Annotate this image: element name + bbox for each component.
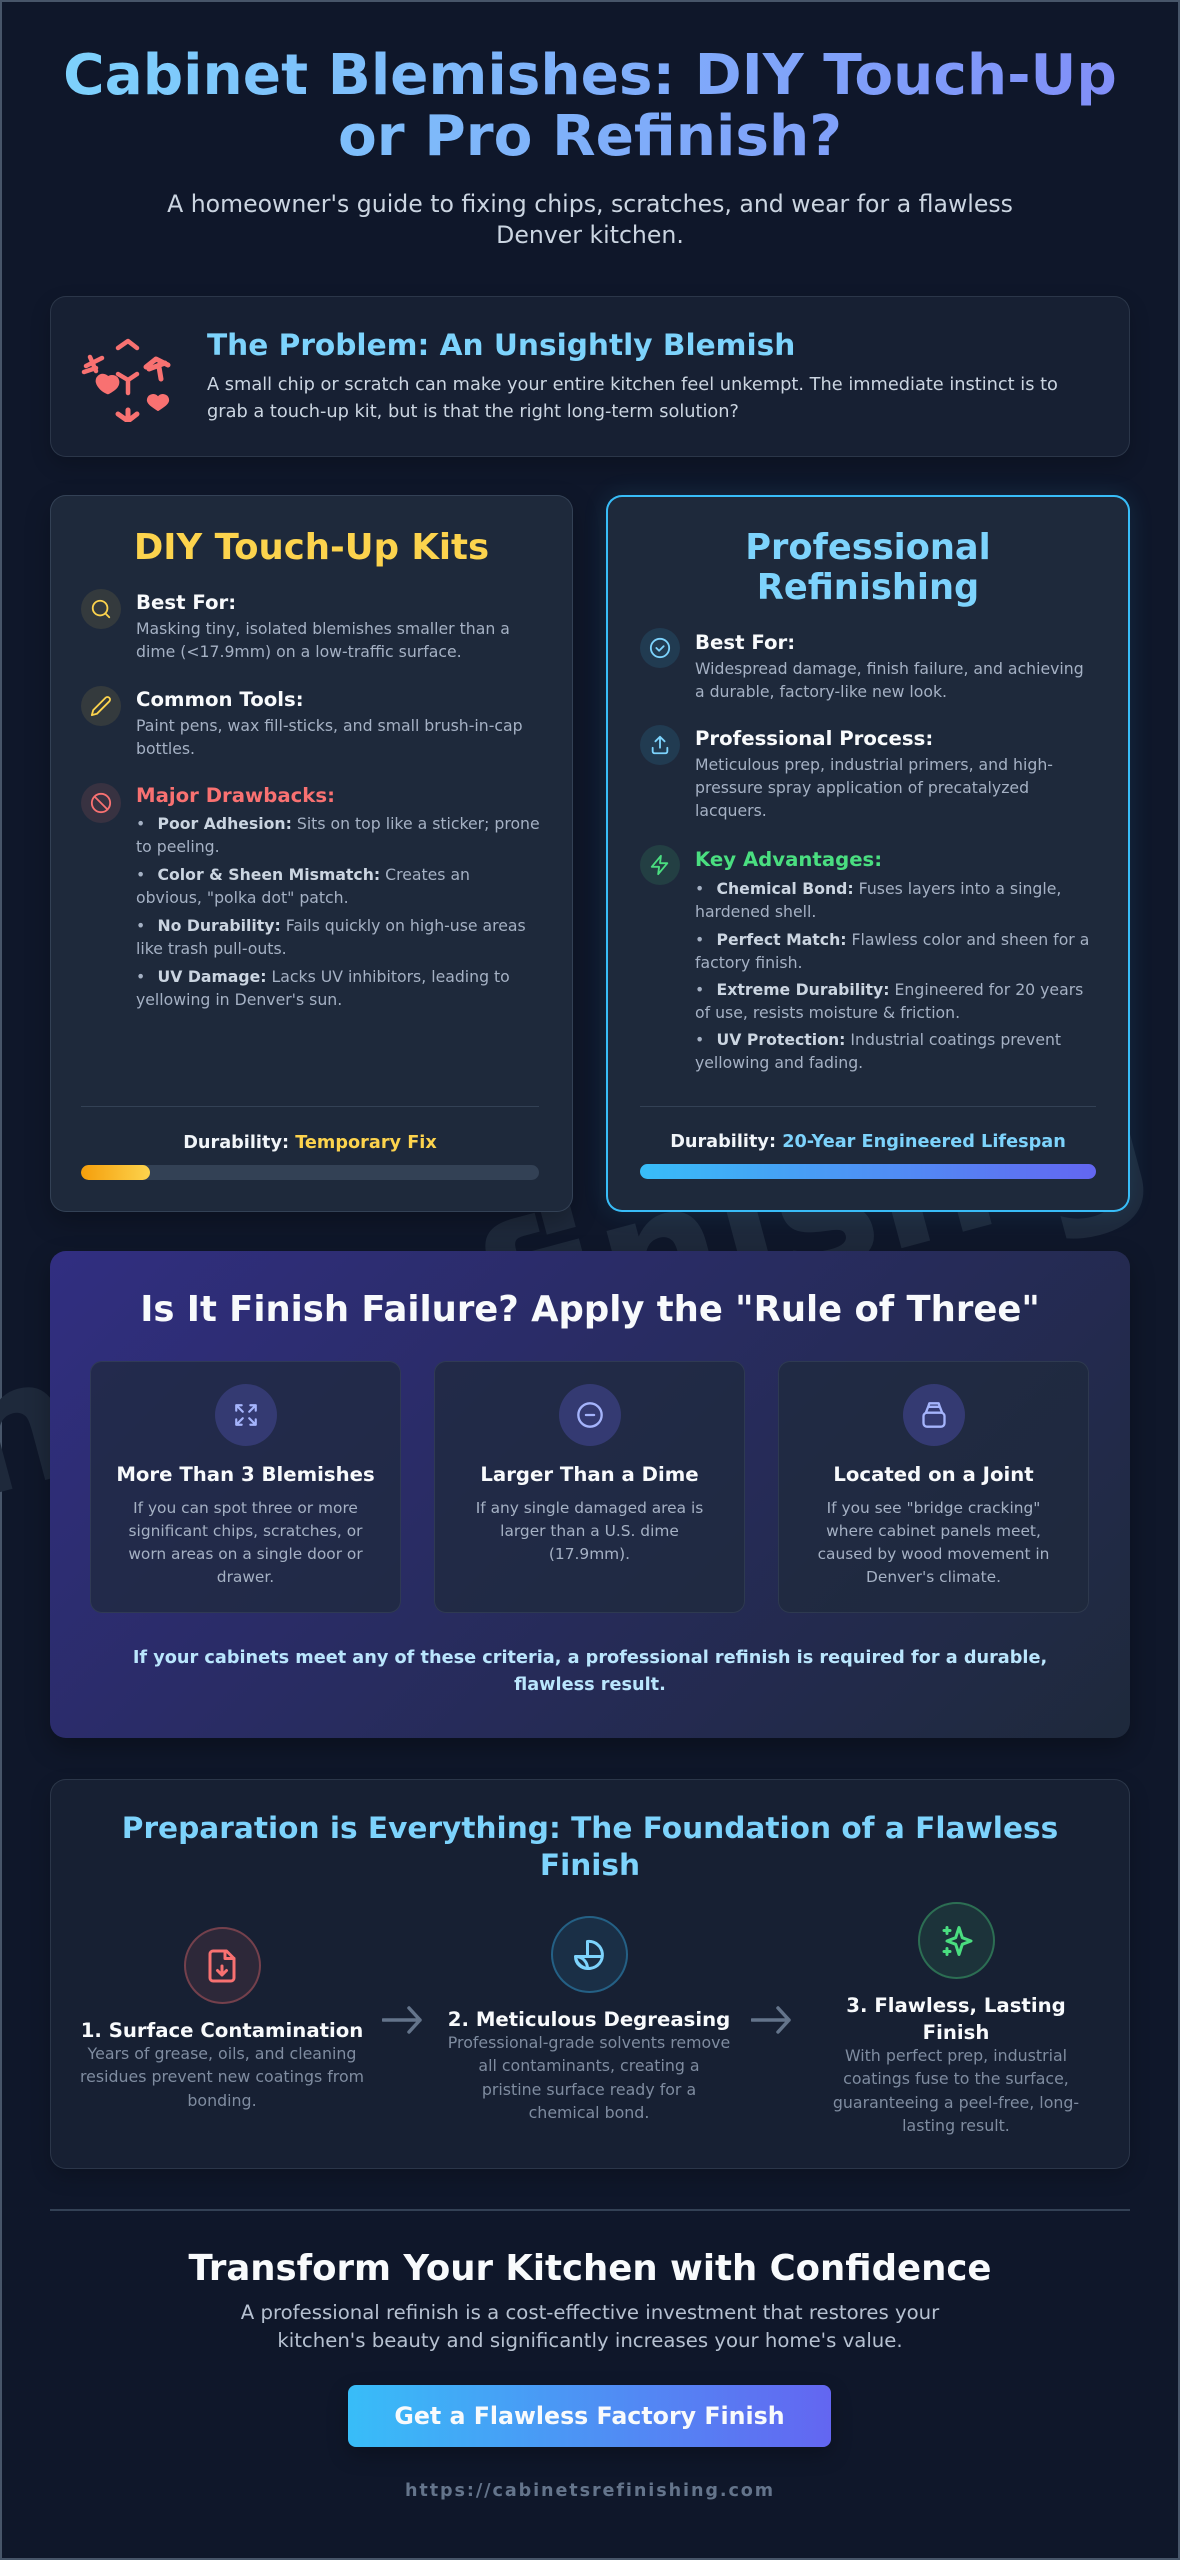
step 3 text: lasting result. bbox=[902, 2116, 1010, 2135]
card text: If you can spot three or more bbox=[133, 1498, 358, 1516]
drawback 3: like trash pull-outs. bbox=[136, 938, 287, 958]
advantage 1: Chemical Bond: Fuses layers into a single, bbox=[716, 878, 1061, 898]
rule heading: Is It Finish Failure? Apply the "Rule of Three" bbox=[140, 1289, 1040, 1330]
panel: the problem bbox=[50, 296, 1130, 457]
icon: check circle bbox=[640, 628, 680, 668]
card text: Denver's climate. bbox=[866, 1568, 1001, 1586]
problem heading: The Problem: An Unsightly Blemish bbox=[207, 328, 795, 362]
preparation heading: Preparation is Everything: The Foundation of a Flawless bbox=[122, 1810, 1058, 1844]
subtitle bbox=[167, 190, 1013, 248]
icon: dime bbox=[558, 1384, 620, 1446]
pro durability bar bbox=[640, 1164, 1096, 1179]
pro best heading: Best For: bbox=[695, 631, 795, 654]
drawback 1: to peeling. bbox=[136, 836, 220, 856]
pro heading bbox=[745, 527, 991, 608]
icon: zap bbox=[640, 845, 680, 885]
website url: https://cabinetsrefinishing.com bbox=[405, 2481, 775, 2501]
step 1 bbox=[80, 1927, 364, 2110]
process text: Meticulous prep, industrial primers, and high- bbox=[695, 754, 1053, 774]
step 3 text bbox=[833, 2046, 1079, 2135]
pro heading: Professional bbox=[745, 527, 991, 568]
card: located on a joint bbox=[778, 1361, 1089, 1613]
advantage 1: hardened shell. bbox=[695, 902, 816, 920]
best for heading: Best For: bbox=[136, 591, 236, 614]
card: larger than a dime bbox=[434, 1361, 745, 1613]
icon: pie segments bbox=[550, 1916, 628, 1993]
step 3 text: guaranteeing a peel-free, long- bbox=[833, 2093, 1079, 2112]
card heading: Located on a Joint bbox=[833, 1463, 1034, 1486]
card: more than 3 blemishes bbox=[90, 1361, 401, 1613]
advantage 4: • bbox=[695, 1030, 704, 1048]
icon: sparkles bbox=[918, 1902, 994, 1979]
step 2 text: chemical bond. bbox=[529, 2103, 649, 2122]
card text: caused by wood movement in bbox=[818, 1544, 1049, 1562]
panel: DIY touch-up kits bbox=[50, 495, 573, 1212]
pro best text: Widespread damage, finish failure, and achieving bbox=[695, 658, 1084, 678]
advantage 2: • bbox=[695, 930, 704, 948]
drawback 2 bbox=[136, 864, 470, 906]
step 2 heading: 2. Meticulous Degreasing bbox=[448, 2008, 730, 2030]
arrow 2 bbox=[751, 2006, 791, 2034]
icon: search bbox=[81, 589, 121, 629]
advantage list bbox=[695, 878, 1089, 1072]
advantage 2: Perfect Match: Flawless color and sheen for a bbox=[716, 930, 1089, 948]
icon: file down bbox=[184, 1927, 260, 2004]
drawback list bbox=[136, 814, 540, 1008]
drawback 1: Poor Adhesion: Sits on top like a sticker; prone bbox=[158, 814, 540, 832]
best for text bbox=[136, 618, 510, 660]
advantage 3 bbox=[695, 980, 1083, 1022]
process heading: Professional Process: bbox=[695, 727, 933, 750]
card text bbox=[128, 1498, 363, 1586]
card text bbox=[818, 1498, 1049, 1586]
drawbacks heading: Major Drawbacks: bbox=[136, 784, 335, 807]
pro heading: Refinishing bbox=[757, 567, 979, 608]
card text: If you see "bridge cracking" bbox=[827, 1498, 1040, 1516]
process text: pressure spray application of precatalyzed bbox=[695, 778, 1029, 796]
process text: lacquers. bbox=[695, 800, 767, 820]
panel: professional refinishing bbox=[606, 495, 1130, 1212]
durability bar bbox=[81, 1165, 539, 1180]
drawback 3: No Durability: Fails quickly on high-use areas bbox=[158, 916, 526, 934]
icon: upload bbox=[640, 725, 680, 765]
step 2 text: all contaminants, creating a bbox=[478, 2056, 700, 2075]
rule conclusion: If your cabinets meet any of these criteria, a professional refinish is required for a durable, bbox=[133, 1648, 1047, 1668]
panel: rule of three bbox=[50, 1251, 1130, 1738]
step 1 text: bonding. bbox=[187, 2091, 257, 2110]
advantage 4: yellowing and fading. bbox=[695, 1052, 863, 1072]
card text: significant chips, scratches, or bbox=[129, 1522, 362, 1540]
drawbacks bbox=[136, 784, 540, 1008]
card text: where cabinet panels meet, bbox=[826, 1522, 1041, 1540]
drawback 1 bbox=[136, 814, 540, 856]
card text: If any single damaged area is bbox=[476, 1498, 703, 1516]
drawback 4 bbox=[136, 966, 510, 1008]
problem text bbox=[207, 374, 1058, 422]
CTA button: Get a Flawless Factory Finish bbox=[394, 2402, 785, 2430]
arrow 1 bbox=[382, 2006, 422, 2034]
tools text: bottles. bbox=[136, 738, 195, 758]
panel: preparation bbox=[50, 1779, 1130, 2169]
best for text: dime (<17.9mm) on a low-traffic surface. bbox=[136, 642, 462, 660]
icon: pencil bbox=[81, 686, 121, 726]
title: or Pro Refinish? bbox=[338, 104, 842, 169]
watermark text: g bbox=[999, 1030, 1168, 1253]
subtitle: Denver kitchen. bbox=[496, 220, 684, 248]
card text: (17.9mm). bbox=[549, 1544, 630, 1562]
advantage 4: UV Protection: Industrial coatings prevent bbox=[716, 1030, 1061, 1048]
watermark text: finish bbox=[454, 1069, 1015, 1397]
card text: worn areas on a single door or bbox=[128, 1544, 363, 1562]
step 3 bbox=[833, 1902, 1079, 2135]
pro process bbox=[695, 727, 1053, 820]
step 3 heading: Finish bbox=[923, 2020, 989, 2044]
best for bbox=[136, 591, 510, 660]
card text: larger than a U.S. dime bbox=[500, 1522, 679, 1540]
advantage 1: • bbox=[695, 878, 704, 898]
pro best for bbox=[695, 631, 1084, 700]
advantage 3: Extreme Durability: Engineered for 20 years bbox=[716, 980, 1083, 998]
closing text bbox=[0, 2299, 1180, 2354]
advantage 2 bbox=[695, 930, 1089, 972]
card heading: More Than 3 Blemishes bbox=[116, 1463, 375, 1486]
drawback 2: Color & Sheen Mismatch: Creates an bbox=[158, 864, 470, 884]
drawback 4: yellowing in Denver's sun. bbox=[136, 990, 342, 1008]
step 2 text: Professional-grade solvents remove bbox=[448, 2033, 730, 2052]
step 2 text bbox=[448, 2033, 730, 2122]
step 1 heading: 1. Surface Contamination bbox=[81, 2018, 363, 2042]
step 3 text: coatings fuse to the surface, bbox=[843, 2069, 1069, 2088]
bar fill 15% bbox=[81, 1165, 150, 1180]
tools text: Paint pens, wax fill-sticks, and small brush-in-cap bbox=[136, 716, 523, 734]
closing heading: Transform Your Kitchen with Confidence bbox=[188, 2248, 992, 2289]
process text bbox=[695, 754, 1053, 820]
closing text: A professional refinish is a cost-effective investment that restores your bbox=[241, 2301, 939, 2324]
closing text: kitchen's beauty and significantly increases your home's value. bbox=[277, 2328, 903, 2352]
advantages heading: Key Advantages: bbox=[695, 848, 882, 871]
tools heading: Common Tools: bbox=[136, 688, 304, 711]
icon: blemish cluster bbox=[82, 338, 170, 422]
rule conclusion bbox=[133, 1648, 1047, 1694]
drawback 4: UV Damage: Lacks UV inhibitors, leading to bbox=[158, 966, 510, 986]
problem text: grab a touch-up kit, but is that the right long-term solution? bbox=[207, 402, 739, 422]
icon: ban bbox=[81, 783, 121, 823]
drawback 2: • bbox=[136, 864, 145, 884]
title bbox=[40, 46, 1140, 167]
advantage 3: • bbox=[695, 980, 704, 998]
step 1 text bbox=[80, 2044, 364, 2110]
step 3 heading: 3. Flawless, Lasting bbox=[846, 1994, 1066, 2016]
drawback 1: • bbox=[136, 814, 145, 832]
drawback 3: • bbox=[136, 916, 145, 934]
DIY heading: DIY Touch-Up Kits bbox=[134, 527, 489, 568]
step 2 bbox=[448, 1916, 730, 2122]
drawback 3 bbox=[136, 916, 526, 958]
step 2 text: pristine surface ready for a bbox=[482, 2080, 696, 2099]
card heading: Larger Than a Dime bbox=[480, 1463, 699, 1486]
advantages bbox=[695, 848, 1089, 1072]
step 1 text: residues prevent new coatings from bbox=[80, 2067, 364, 2086]
drawback 2: obvious, "polka dot" patch. bbox=[136, 888, 349, 906]
rule conclusion: flawless result. bbox=[514, 1674, 666, 1694]
advantage 1 bbox=[695, 878, 1061, 920]
step 3 text: With perfect prep, industrial bbox=[845, 2046, 1067, 2065]
pro best text: a durable, factory-like new look. bbox=[695, 682, 947, 700]
step 1 text: Years of grease, oils, and cleaning bbox=[88, 2044, 356, 2063]
title: Cabinet Blemishes: DIY Touch-Up bbox=[63, 43, 1117, 108]
durability label: Durability: Temporary Fix bbox=[183, 1133, 437, 1153]
best for text: Masking tiny, isolated blemishes smaller than a bbox=[136, 618, 510, 638]
pro durability label: Durability: 20-Year Engineered Lifespan bbox=[670, 1132, 1066, 1152]
subtitle: A homeowner's guide to fixing chips, scratches, and wear for a flawless bbox=[167, 190, 1013, 218]
advantage 2: factory finish. bbox=[695, 952, 803, 972]
advantage 3: of use, resists moisture & friction. bbox=[695, 1002, 960, 1022]
problem text: A small chip or scratch can make your entire kitchen feel unkempt. The immediate instinct is to bbox=[207, 374, 1058, 394]
step 3 heading bbox=[846, 1994, 1066, 2044]
common tools bbox=[136, 688, 523, 758]
preparation heading bbox=[122, 1810, 1058, 1882]
card text bbox=[476, 1498, 703, 1562]
icon: arrows bbox=[214, 1384, 276, 1446]
pro best text bbox=[695, 658, 1084, 700]
CTA button bbox=[348, 2385, 831, 2447]
tools text bbox=[136, 716, 523, 758]
preparation heading: Finish bbox=[540, 1848, 640, 1882]
advantage 4 bbox=[695, 1030, 1061, 1072]
card text: drawer. bbox=[217, 1568, 274, 1586]
icon: joint bbox=[902, 1384, 964, 1446]
drawback 4: • bbox=[136, 966, 145, 986]
